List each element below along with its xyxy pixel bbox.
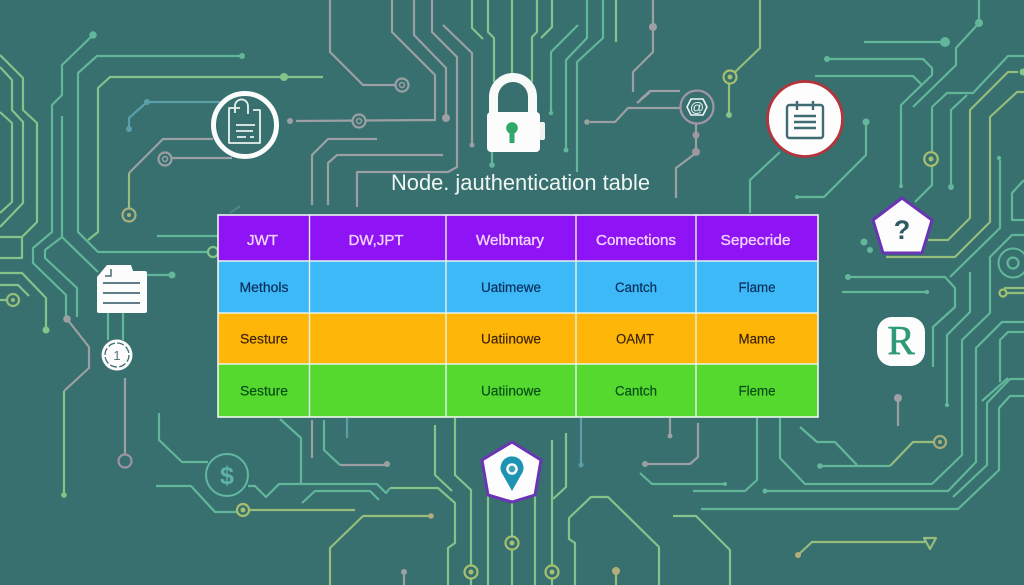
circuit traces: bottom — [156, 413, 730, 585]
icon: calendar badge — [768, 82, 842, 156]
table header row — [218, 215, 818, 261]
title: Node. jauthentication table — [391, 170, 650, 195]
table row: green: Cantch — [615, 384, 657, 398]
table row: green: Sesture — [240, 384, 288, 398]
icon: dollar badge — [206, 454, 248, 496]
table row: green: Uatiinowe — [481, 384, 541, 398]
table row: blue: Methols — [240, 280, 289, 295]
icon: numbered coin: 1 — [113, 348, 121, 363]
icon: padlock — [487, 78, 545, 152]
table row: green — [218, 364, 818, 417]
table header row: DW,JPT — [348, 232, 404, 249]
icon: R badge — [877, 317, 925, 366]
table row: orange: Sesture — [240, 332, 288, 346]
circuit traces: left side — [0, 31, 323, 498]
icon: at-sign badge — [680, 90, 714, 124]
table row: orange — [218, 313, 818, 364]
table row: orange: Uatiinowe — [481, 332, 541, 346]
icon: secure document badge — [214, 94, 276, 156]
table row: blue: Cantch — [615, 280, 657, 295]
table row: green: Fleme — [738, 384, 776, 398]
icon: question pentagon — [873, 198, 932, 253]
table row: blue: Flame — [738, 280, 776, 295]
icon: dollar badge: $ — [220, 462, 234, 490]
table header row: Welbntary — [476, 232, 544, 249]
table header row: Sepecride — [720, 232, 790, 249]
icon: at-sign badge: @ — [690, 99, 704, 115]
icon: question pentagon: ? — [894, 215, 910, 245]
table header row: Comections — [596, 232, 676, 249]
circuit traces: top right — [724, 0, 1024, 277]
circuit traces: right side — [693, 235, 1024, 558]
icon: document — [97, 265, 147, 313]
circuit traces: top centre — [287, 0, 700, 207]
table row: blue — [218, 261, 818, 313]
icon: R badge: R — [887, 317, 915, 363]
table row: orange: OAMT — [616, 332, 654, 346]
table row: orange: Mame — [738, 332, 776, 346]
icon: location pentagon — [482, 442, 541, 502]
table row: blue: Uatimewe — [481, 280, 541, 295]
icon: numbered coin — [102, 340, 132, 370]
authentication table — [218, 215, 818, 417]
table header row: JWT — [247, 232, 278, 249]
